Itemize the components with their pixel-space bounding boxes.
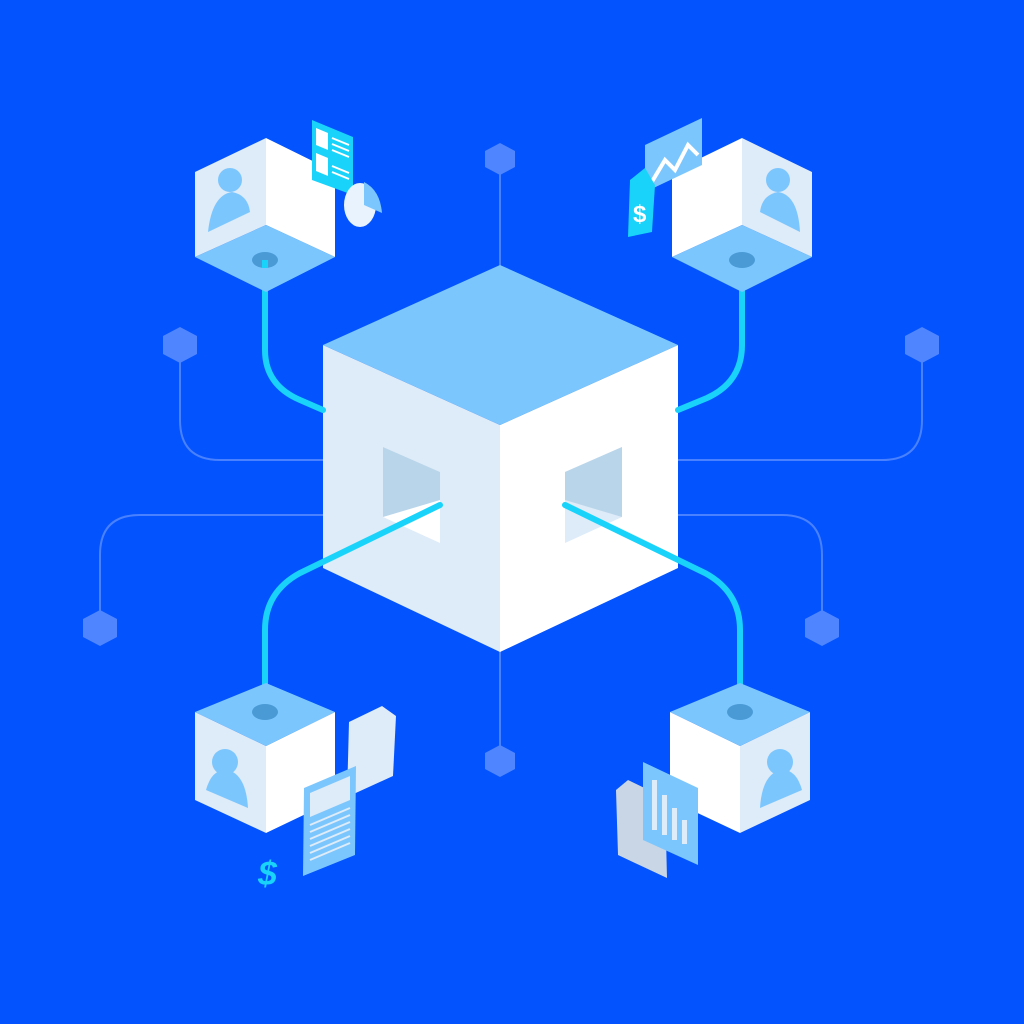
icon: chart and price tag top-right [628,118,702,237]
icon: chart and price tag top-right: $ [633,201,647,228]
icon: documents and dollar bottom-left: $ [257,855,278,893]
icon: documents with bar chart bottom-right [616,762,698,878]
central cube [323,265,678,652]
cube top-right [672,138,812,292]
thin connector lines [100,160,922,760]
cube bottom-right [670,683,810,833]
cube bottom-left [195,683,335,833]
hexagon nodes [83,143,939,777]
right window [565,447,622,543]
icon: document and pie top-left [312,120,382,227]
left window [383,447,440,543]
cyan connection lines [265,262,742,712]
icon: documents and dollar bottom-left [257,706,396,893]
cube top-left [195,138,335,292]
